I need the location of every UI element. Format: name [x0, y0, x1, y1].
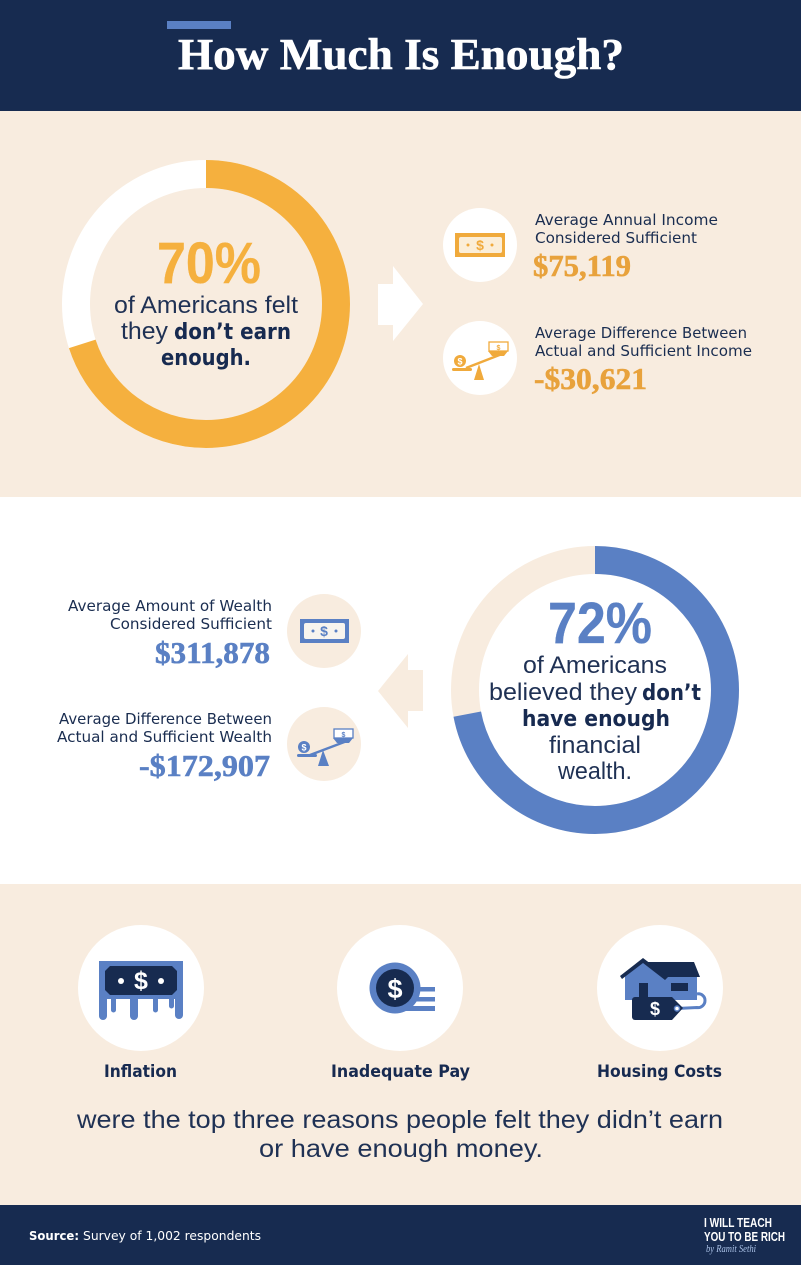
icon: inadequate pay: $	[387, 974, 403, 1004]
stat: wealth sufficient: Considered Sufficient	[110, 615, 272, 633]
donut chart: 72%: have enough	[522, 707, 670, 732]
donut chart: 70%: don’t earn	[174, 320, 291, 345]
donut chart: 70%: enough.	[161, 346, 251, 371]
stat: income difference	[534, 324, 752, 396]
donut chart: 70%: 70%	[157, 231, 261, 296]
label: housing costs: Housing Costs	[597, 1062, 722, 1082]
logo	[704, 1215, 785, 1255]
stat: annual income: Average Annual Income	[535, 211, 718, 229]
logo: by Ramit Sethi	[706, 1244, 756, 1255]
stat: wealth difference	[57, 710, 272, 783]
panel: income	[0, 111, 801, 497]
donut chart: 70%	[76, 174, 336, 434]
label: inflation: Inflation	[104, 1062, 177, 1082]
icon: balance scale	[443, 321, 517, 395]
icon: banknote	[443, 208, 517, 282]
stat: annual income: Considered Sufficient	[535, 229, 697, 247]
donut chart: 72%: financial	[549, 732, 641, 759]
stat: wealth sufficient: $311,878	[155, 635, 270, 670]
logo: I WILL TEACH	[704, 1215, 772, 1230]
panel: reasons	[0, 884, 801, 1205]
source note: Source:	[29, 1228, 79, 1243]
panel: wealth	[57, 560, 725, 820]
icon: housing costs: $	[650, 999, 660, 1019]
icon: banknote blue: $	[320, 623, 328, 639]
stat: income difference: -$30,621	[534, 361, 647, 396]
summary text	[76, 1106, 723, 1163]
stat: wealth difference: -$172,907	[139, 748, 270, 783]
icon: balance scale blue: $	[342, 732, 346, 739]
stat: wealth sufficient: Average Amount of Wealth	[68, 597, 272, 615]
header band	[0, 0, 801, 111]
title: How Much Is Enough?	[178, 30, 624, 79]
stat: annual income: $75,119	[533, 248, 631, 283]
donut chart: 70%: of Americans felt	[114, 292, 298, 319]
stat: wealth difference: Average Difference Between	[59, 710, 272, 728]
donut chart: 70%: they	[121, 318, 168, 345]
icon: banknote blue	[287, 594, 361, 668]
icon: inadequate pay	[337, 925, 463, 1051]
arrow: right	[378, 266, 423, 341]
donut chart: 72%: don’t	[642, 681, 701, 706]
icon: balance scale: $	[497, 345, 501, 352]
source note: Survey of 1,002 respondents	[83, 1228, 261, 1243]
icon: housing costs	[597, 925, 723, 1051]
donut chart: 72%: wealth.	[557, 758, 632, 785]
icon: banknote: $	[476, 237, 484, 253]
donut chart: 72%: 72%	[548, 591, 652, 656]
footer band	[0, 1205, 801, 1265]
icon: balance scale: $	[457, 356, 463, 366]
stat: wealth sufficient	[68, 597, 272, 670]
arrow: left	[378, 654, 423, 728]
stat: wealth difference: Actual and Sufficient Wealth	[57, 728, 272, 746]
icon: balance scale blue: $	[301, 742, 307, 752]
stat: income difference: Average Difference Between	[535, 324, 747, 342]
summary text: or have enough money.	[259, 1135, 543, 1163]
donut chart: 72%: believed they	[489, 679, 637, 706]
icon: balance scale blue	[287, 707, 361, 781]
icon: inflation: $	[134, 967, 148, 995]
summary text: were the top three reasons people felt they didn’t earn	[76, 1106, 723, 1134]
donut chart: 72%: of Americans	[523, 652, 667, 679]
icon: inflation	[78, 925, 204, 1051]
donut chart: 72%	[465, 560, 725, 820]
stat: income difference: Actual and Sufficient Income	[535, 342, 752, 360]
label: inadequate pay: Inadequate Pay	[331, 1062, 470, 1082]
stat: annual income	[533, 211, 718, 283]
